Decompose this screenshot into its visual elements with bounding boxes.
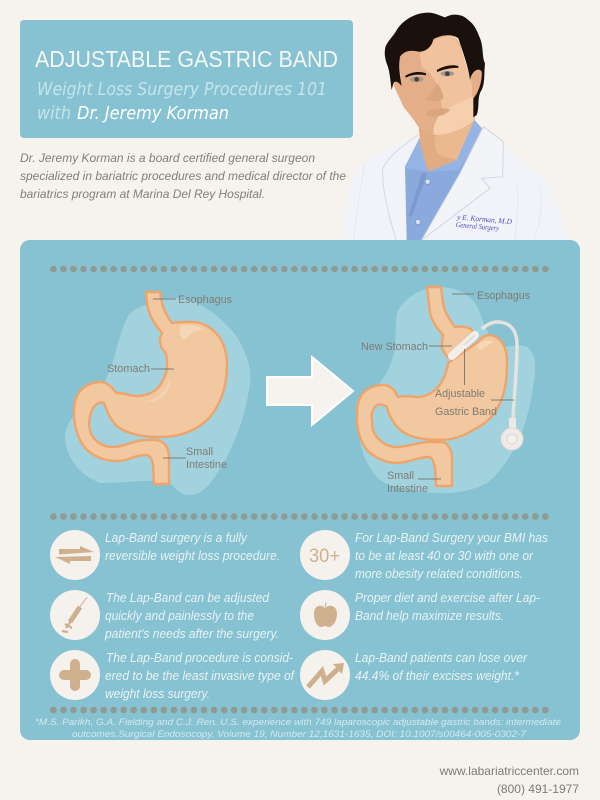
- footnote: *M.S. Parikh, G.A. Fielding and C.J. Ren. U.S. experience with 749 laparoscopic adjustable gastric bands: intermediate: [35, 717, 561, 728]
- main panel: [20, 240, 580, 740]
- coat name embroidery: y E. Korman, M.D: [456, 212, 513, 226]
- label: esophagus: [153, 294, 232, 306]
- label: esophagus: Esophagus: [477, 290, 530, 302]
- label: small intestine: [163, 446, 227, 471]
- stomach highlight: [477, 341, 494, 350]
- fact: weight loss: Lap-Band patients can lose over: [355, 651, 528, 665]
- fact: diet and exercise: [300, 590, 540, 640]
- shirt placket shadow: [408, 173, 427, 217]
- diagram: stomach before surgery: [65, 292, 250, 495]
- stomach shape: [74, 292, 227, 484]
- fact: adjustable: patient's needs after the surgery.: [104, 627, 279, 641]
- neck: [418, 100, 475, 172]
- lab coat: [342, 127, 568, 240]
- intro paragraph: specialized in bariatric procedures and medical director of the: [20, 169, 346, 183]
- eyes and brows: [405, 65, 458, 82]
- label: stomach: [107, 363, 174, 375]
- label: small intestine: Intestine: [387, 483, 428, 495]
- fact: adjustable: The Lap-Band can be adjusted: [106, 591, 270, 605]
- icon: 30+: [300, 530, 350, 580]
- footer contact: www.labariatriccenter.com: [439, 764, 579, 778]
- fact: reversible: reversible weight loss procedure.: [105, 549, 280, 563]
- fact: least invasive: ered to be the least invasive type of: [105, 669, 295, 683]
- fact: reversible: Lap-Band surgery is a fully: [105, 531, 248, 545]
- adjustable band: [452, 335, 475, 356]
- fact: diet and exercise: Proper diet and exercise after Lap-: [355, 591, 540, 605]
- fact: BMI: more obesity related conditions.: [355, 567, 523, 581]
- label: new stomach: New Stomach: [361, 341, 428, 353]
- label: small intestine: Small: [387, 470, 414, 482]
- fact: diet and exercise: Band help maximize results.: [355, 609, 504, 623]
- nose: [426, 83, 443, 101]
- coat lapels and seams: [353, 127, 541, 240]
- subtitle with doctor name: with: [37, 103, 71, 124]
- subtitle with doctor name: Dr. Jeremy Korman: [77, 103, 229, 124]
- coat name embroidery: [455, 212, 513, 234]
- fact: least invasive: The Lap-Band procedure is consid-: [106, 651, 293, 665]
- hair: [385, 13, 485, 117]
- fact: adjustable: [50, 590, 279, 641]
- fact: weight loss: [300, 650, 528, 700]
- label: stomach: Stomach: [107, 363, 150, 375]
- icon: rising arrow: [300, 650, 350, 700]
- subtitle: Weight Loss Surgery Procedures 101: [37, 79, 327, 100]
- coat name embroidery: General Surgery: [455, 220, 500, 233]
- illustration: Dr. Jeremy Korman portrait: [342, 13, 568, 240]
- fact: least invasive: [50, 650, 295, 701]
- fact: least invasive: weight loss surgery.: [105, 687, 210, 701]
- intro paragraph: Dr. Jeremy Korman is a board certified general surgeon: [20, 151, 315, 165]
- label: adjustable gastric band: Adjustable: [435, 388, 485, 400]
- intro paragraph: bariatrics program at Marina Del Rey Hospital.: [20, 187, 265, 201]
- diagram: stomach with gastric band: [357, 287, 535, 495]
- header banner: [20, 20, 353, 138]
- lips: [425, 108, 450, 117]
- fact: BMI: [300, 530, 548, 581]
- fact: BMI: For Lap-Band Surgery your BMI has: [355, 531, 548, 545]
- label: esophagus: Esophagus: [178, 294, 232, 306]
- stomach highlights: [180, 325, 204, 340]
- icon: 30+: 30+: [309, 546, 340, 567]
- shirt buttons: [425, 179, 430, 184]
- label: small intestine: Intestine: [186, 459, 227, 471]
- arrow: before to after: [267, 357, 353, 425]
- footnote: outcomes.Surgical Endosocopy. Volume 19, Number 12,1631-1635, DOI: 10.1007/s00464-005-0302-7: [72, 729, 527, 740]
- shirt: [405, 120, 484, 240]
- label: small intestine: [387, 470, 441, 495]
- footnote: [35, 717, 561, 740]
- esophagus and new stomach pouch: [427, 287, 474, 358]
- fact: adjustable: quickly and painlessly to the: [105, 609, 254, 623]
- label: adjustable gastric band: Gastric Band: [435, 406, 497, 418]
- title: ADJUSTABLE GASTRIC BAND: [35, 46, 338, 72]
- footer contact: [439, 764, 579, 796]
- label: esophagus: [452, 290, 530, 302]
- lower stomach and intestine: [357, 335, 507, 486]
- label: adjustable gastric band: [435, 349, 514, 418]
- fact: weight loss: 44.4% of their excises weight.*: [355, 669, 520, 683]
- icon: apple: [300, 590, 350, 640]
- forehead and cheek highlight: [420, 35, 473, 135]
- footer contact: (800) 491-1977: [497, 782, 579, 796]
- chin highlight: [433, 97, 474, 135]
- icon: syringe: [50, 590, 100, 640]
- tube and port: [482, 322, 523, 450]
- label: small intestine: Small: [186, 446, 213, 458]
- face and ears: [393, 35, 483, 135]
- fact: reversible: [50, 530, 280, 580]
- icon: medical cross: [50, 650, 100, 700]
- shirt collar: [405, 120, 484, 172]
- fact: BMI: to be at least 40 or 30 with one or: [355, 549, 534, 563]
- intro paragraph: [20, 151, 346, 201]
- icon: reversing arrows: [50, 530, 100, 580]
